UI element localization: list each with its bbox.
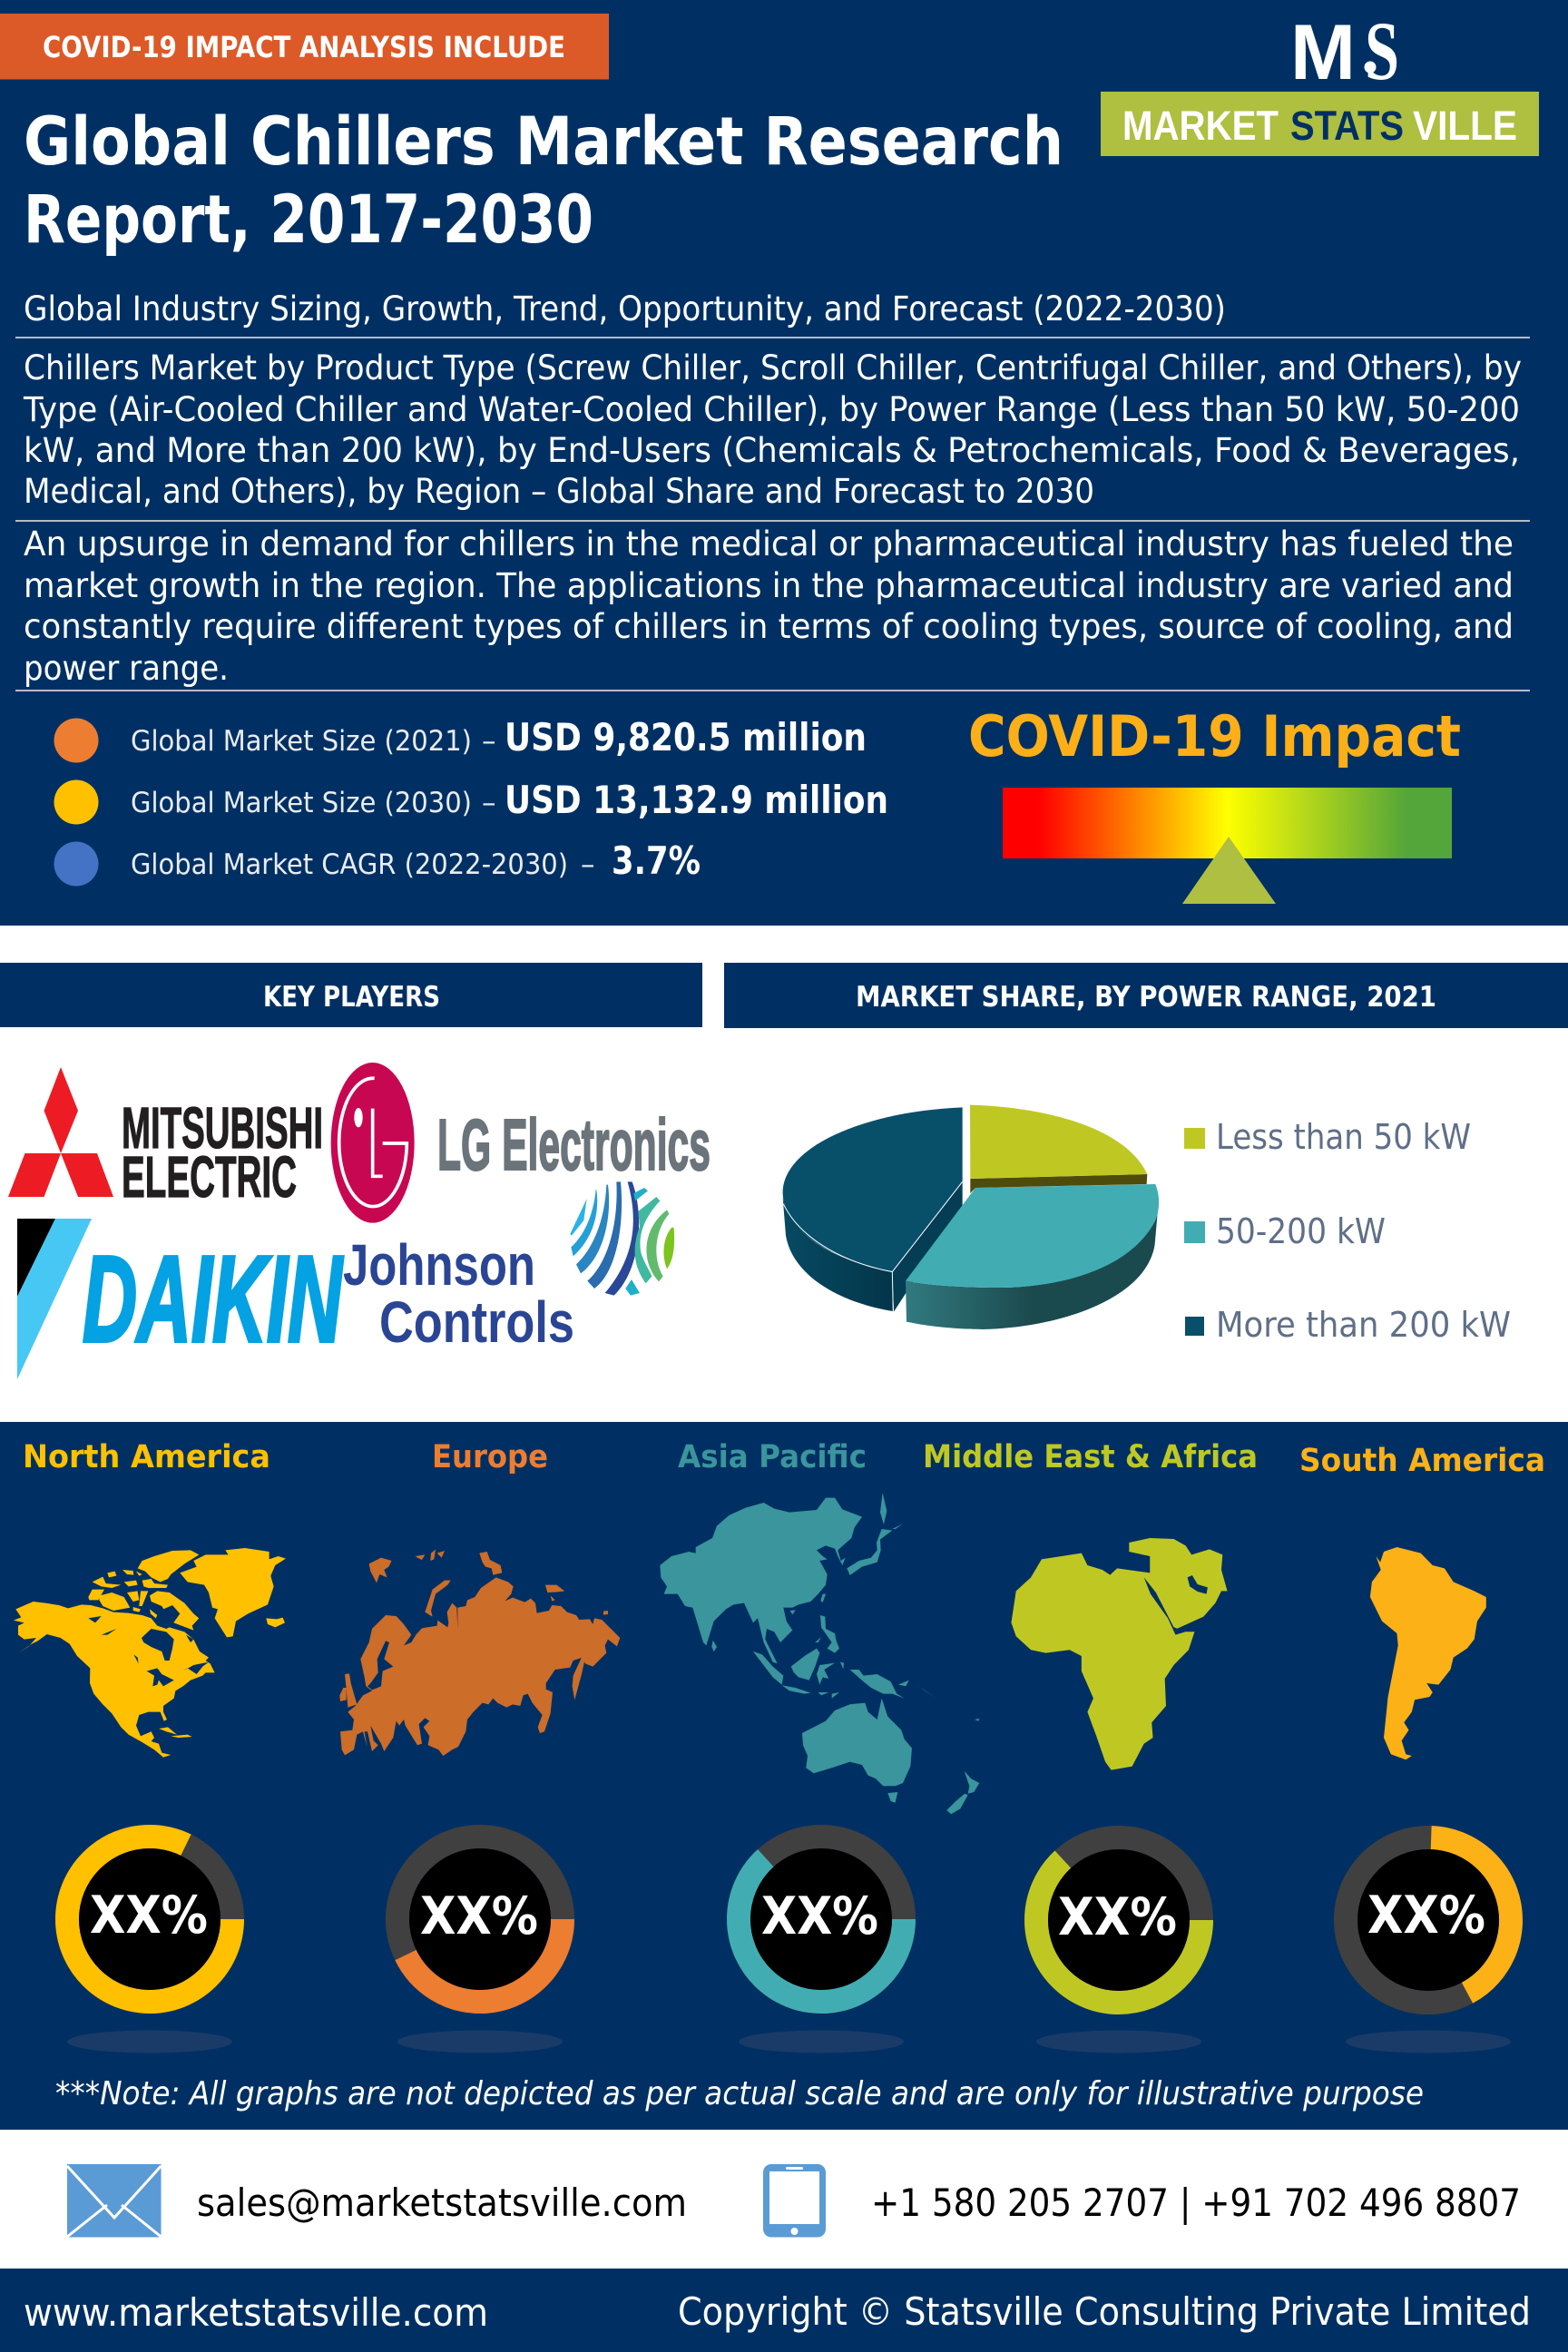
heading: COVID-19 Impact: COVID-19 Impact bbox=[968, 703, 1461, 769]
map: South America bbox=[1370, 1547, 1486, 1759]
map: Asia Pacific bbox=[660, 1493, 979, 1814]
text block: market scope: Type (Air-Cooled Chiller and Water-Cooled Chiller), by Power Range (Less than 50 kW, 50-200 bbox=[23, 390, 1520, 429]
stat: market CAGR bbox=[54, 838, 701, 886]
panel: contact bbox=[67, 2164, 1521, 2238]
logo: Johnson Controls wordmark: Controls bbox=[379, 1289, 574, 1355]
map: Europe and Russia bbox=[339, 1550, 620, 1756]
text block: market scope: kW, and More than 200 kW), by End-Users (Chemicals & Petrochemicals, Food & Beverages, bbox=[24, 431, 1520, 470]
logo: Market Stats Ville: M bbox=[1290, 9, 1356, 96]
pie slice: 50-200 kW side bbox=[906, 1210, 1158, 1329]
panel: header bbox=[0, 0, 1568, 926]
logo: Market Stats Ville: MARKET bbox=[1122, 103, 1279, 149]
pie slice: more than 200 kW side bbox=[783, 1181, 963, 1312]
text block: market description: An upsurge in demand for chillers in the medical or pharmaceutical industry has fueled the bbox=[24, 524, 1514, 564]
contact: email: sales@marketstatsville.com bbox=[197, 2180, 687, 2225]
logo: Johnson Controls wordmark bbox=[343, 1232, 574, 1355]
text block: market description: power range. bbox=[24, 649, 229, 688]
logo: Daikin: DAIKIN bbox=[83, 1230, 344, 1367]
donut: South America: XX% bbox=[1367, 1886, 1485, 1945]
donut: Europe bbox=[397, 1837, 563, 2053]
stat: market size 2021: Global Market Size (2021) bbox=[131, 725, 472, 758]
heading: Europe: Europe bbox=[432, 1439, 548, 1475]
pie slice: less than 50 kW top bbox=[970, 1105, 1147, 1179]
heading: Middle East & Africa: Middle East & Africa bbox=[923, 1439, 1258, 1475]
panel: footer bbox=[0, 2269, 1568, 2352]
chart: market share pie bbox=[783, 1105, 1159, 1329]
logo: Market Stats Ville: S bbox=[1365, 5, 1399, 97]
stat: market CAGR: Global Market CAGR (2022-2030) bbox=[131, 848, 568, 881]
stat: market size 2030: USD 13,132.9 million bbox=[505, 778, 888, 822]
text block: market description bbox=[24, 524, 1514, 688]
icon: phone bbox=[763, 2164, 826, 2238]
pie slice: 50-200 kW top bbox=[906, 1184, 1159, 1288]
map: North America bbox=[14, 1548, 286, 1758]
stat: market size 2021: USD 9,820.5 million bbox=[505, 715, 867, 760]
logo: Johnson Controls globe bbox=[570, 1181, 674, 1296]
title: Global Chillers Market Research bbox=[24, 103, 1063, 181]
logo: Market Stats Ville bbox=[1101, 5, 1539, 156]
legend: power range bbox=[1184, 1117, 1511, 1345]
logo: Market Stats Ville: VILLE bbox=[1413, 103, 1517, 149]
logo: LG Electronics wordmark: LG Electronics bbox=[437, 1104, 710, 1185]
heading: Asia Pacific: Asia Pacific bbox=[678, 1439, 867, 1475]
panel: regions bbox=[0, 1422, 1568, 2130]
stat: market size 2021 bbox=[54, 715, 867, 762]
pie slice: less than 50 kW side bbox=[970, 1174, 1147, 1193]
stat: market size 2030: Global Market Size (2030) bbox=[131, 787, 472, 819]
stat: market CAGR: – bbox=[581, 848, 595, 881]
logo: Johnson Controls wordmark: Johnson bbox=[343, 1232, 535, 1298]
stat: market size 2030: – bbox=[482, 787, 495, 819]
panel: key player logos bbox=[8, 1063, 710, 1379]
legend: power range: More than 200 kW bbox=[1216, 1305, 1511, 1345]
donut: Middle East and Africa: XX% bbox=[1058, 1887, 1177, 1947]
subtitle: Global Industry Sizing, Growth, Trend, Opportunity, and Forecast (2022-2030) bbox=[24, 289, 1226, 328]
badge: COVID-19 impact analysis: COVID-19 IMPACT ANALYSIS INCLUDE bbox=[43, 30, 565, 64]
text block: market description: market growth in the region. The applications in the pharmaceutical industry are varied and bbox=[24, 566, 1514, 605]
legend: power range: 50-200 kW bbox=[1216, 1211, 1386, 1251]
logo: Daikin bbox=[17, 1219, 344, 1379]
title: Report, 2017-2030 bbox=[24, 181, 593, 259]
heading: South America: South America bbox=[1299, 1443, 1545, 1479]
donut: South America bbox=[1343, 1835, 1514, 2053]
logo: LG bbox=[331, 1063, 415, 1223]
donut: North America: XX% bbox=[90, 1886, 208, 1945]
icon: envelope bbox=[67, 2164, 162, 2238]
logo: Mitsubishi Electric: MITSUBISHI bbox=[122, 1095, 323, 1161]
panel header: key players: KEY PLAYERS bbox=[263, 981, 440, 1014]
panel header: market share bbox=[724, 963, 1568, 1028]
title bbox=[24, 103, 1063, 259]
stat: market size 2021: – bbox=[482, 725, 495, 758]
donut: Asia Pacific bbox=[739, 1837, 904, 2053]
panel header: market share: MARKET SHARE, BY POWER RANGE, 2021 bbox=[856, 981, 1436, 1014]
donut: Asia Pacific: XX% bbox=[761, 1886, 878, 1946]
stat: market size 2030 bbox=[54, 778, 888, 824]
panel header: key players bbox=[0, 963, 702, 1027]
stat: market CAGR: 3.7% bbox=[612, 838, 701, 883]
map: Middle East and Africa bbox=[1011, 1538, 1228, 1770]
text block: market scope bbox=[23, 348, 1522, 511]
gauge: impact gradient bar bbox=[1003, 788, 1452, 904]
logo: Mitsubishi Electric: ELECTRIC bbox=[122, 1144, 297, 1210]
logo: Market Stats Ville: STATS bbox=[1290, 103, 1404, 149]
logo: Mitsubishi Electric bbox=[8, 1067, 323, 1210]
footer: website: www.marketstatsville.com bbox=[24, 2290, 488, 2335]
badge: COVID-19 impact analysis bbox=[0, 14, 609, 80]
legend: power range: Less than 50 kW bbox=[1216, 1117, 1471, 1157]
pie slice: more than 200 kW top bbox=[783, 1107, 963, 1271]
note: ***Note: All graphs are not depicted as per actual scale and are only for illustrative purpose bbox=[55, 2075, 1424, 2112]
heading: North America: North America bbox=[23, 1439, 270, 1475]
donut: Middle East and Africa bbox=[1036, 1838, 1201, 2053]
donut: Europe: XX% bbox=[420, 1886, 538, 1946]
text block: market scope: Medical, and Others), by Region – Global Share and Forecast to 2030 bbox=[24, 472, 1094, 511]
text block: market description: constantly require different types of chillers in terms of cooling types, source of cooling, and bbox=[24, 607, 1514, 646]
donut: North America bbox=[67, 1837, 232, 2053]
